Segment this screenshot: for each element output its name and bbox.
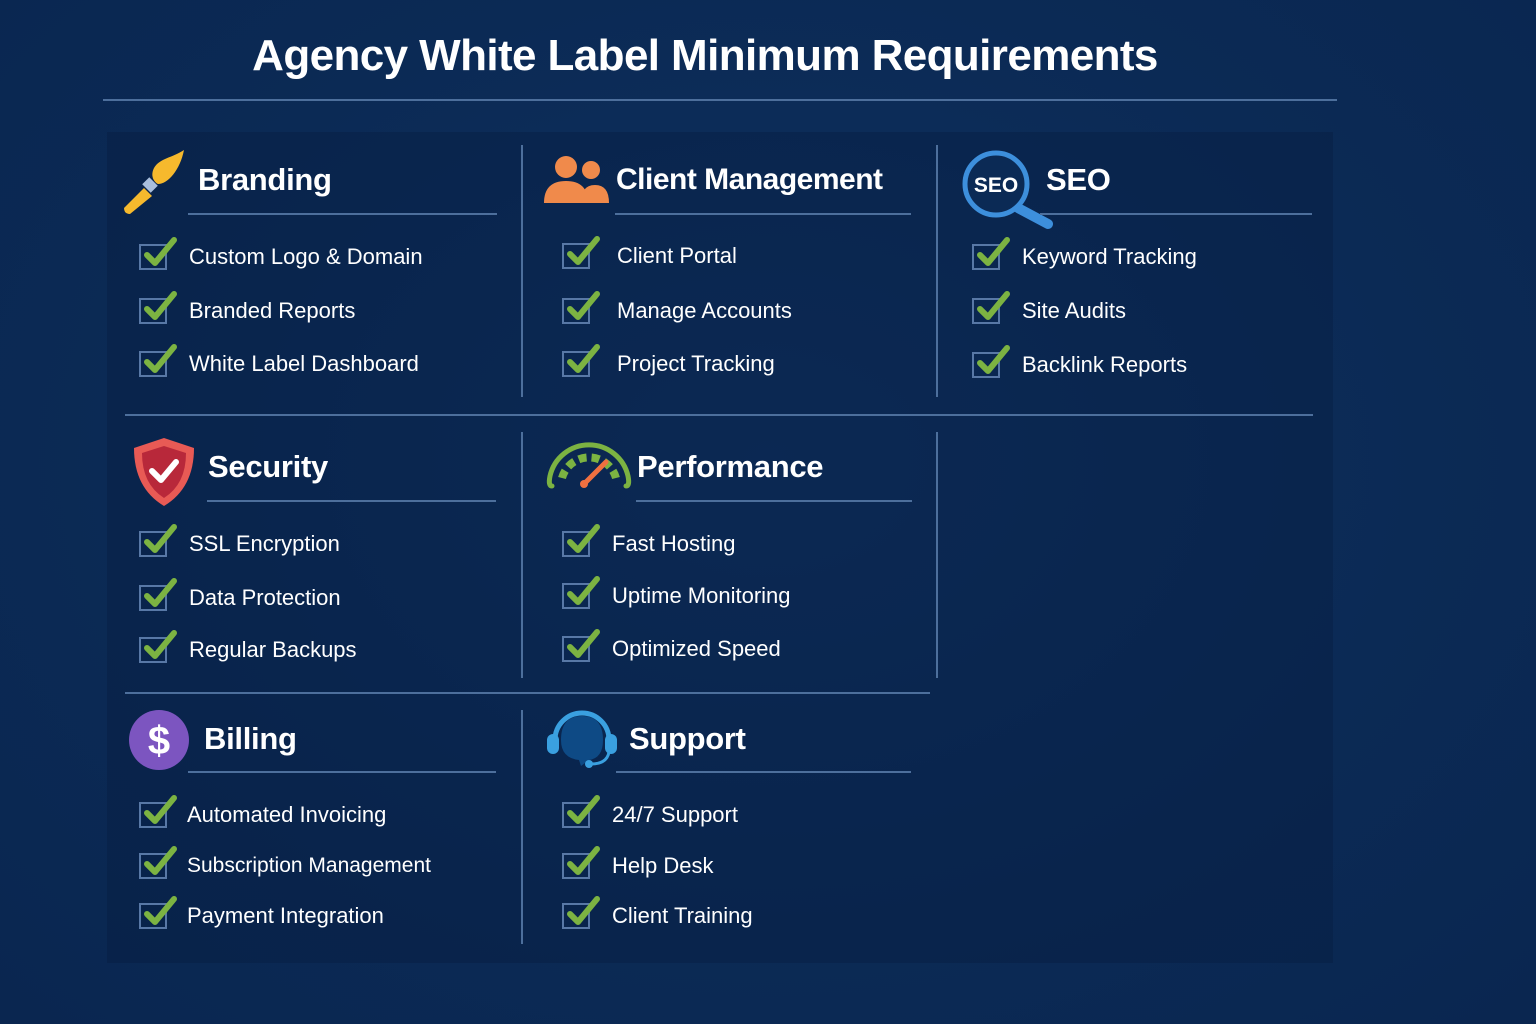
- panel: client management: [544, 156, 911, 215]
- icon: speedometer: [546, 442, 632, 488]
- panel: security: [134, 438, 496, 506]
- list: branding: White Label Dashboard: [189, 351, 419, 376]
- list: performance: Uptime Monitoring: [612, 583, 791, 608]
- list: billing: Subscription Management: [187, 854, 431, 877]
- title: Agency White Label Minimum Requirements: [252, 31, 1158, 80]
- list: performance: Fast Hosting: [612, 531, 736, 556]
- icon: shield: [134, 438, 194, 506]
- icon: people: [544, 156, 609, 203]
- list: branding: Custom Logo & Domain: [189, 244, 423, 269]
- heading: client management: Client Management: [616, 163, 883, 196]
- panel: grid background: [107, 132, 1333, 963]
- list: support: Help Desk: [612, 853, 713, 878]
- heading: security: Security: [208, 449, 328, 484]
- list: security: Data Protection: [189, 585, 341, 610]
- list: security: Regular Backups: [189, 637, 357, 662]
- panel: billing: [129, 710, 496, 773]
- list: seo: Site Audits: [1022, 298, 1126, 323]
- icon: dollar coin: $: [148, 719, 170, 763]
- panel: performance: [546, 442, 912, 502]
- heading: seo: SEO: [1046, 162, 1111, 197]
- icon: dollar coin: [129, 710, 189, 770]
- list: billing: Payment Integration: [187, 903, 384, 928]
- list: seo: [972, 237, 1197, 378]
- list: billing: [139, 795, 431, 929]
- heading: billing: Billing: [204, 721, 297, 756]
- panel: support: [547, 710, 911, 773]
- list: client management: Project Tracking: [617, 351, 775, 376]
- icon: headset: [547, 710, 617, 768]
- list: seo: Keyword Tracking: [1022, 244, 1197, 269]
- list: billing: Automated Invoicing: [187, 802, 386, 827]
- heading: support: Support: [629, 721, 746, 756]
- panel: branding: [124, 150, 497, 215]
- list: client management: [562, 236, 792, 377]
- icon: paintbrush: [124, 150, 184, 214]
- heading: performance: Performance: [637, 449, 823, 484]
- list: branding: [139, 237, 423, 377]
- list: client management: Manage Accounts: [617, 298, 792, 323]
- list: support: Client Training: [612, 903, 753, 928]
- list: support: [562, 795, 753, 929]
- icon: seo magnifier: [962, 150, 1053, 229]
- panel: seo: [962, 150, 1312, 229]
- icon: seo magnifier: SEO: [974, 174, 1018, 197]
- list: branding: Branded Reports: [189, 298, 355, 323]
- list: performance: Optimized Speed: [612, 636, 781, 661]
- list: seo: Backlink Reports: [1022, 352, 1187, 377]
- list: security: [139, 524, 357, 663]
- list: support: 24/7 Support: [612, 802, 738, 827]
- heading: branding: Branding: [198, 162, 332, 197]
- list: performance: [562, 524, 791, 662]
- list: security: SSL Encryption: [189, 531, 340, 556]
- list: client management: Client Portal: [617, 243, 737, 268]
